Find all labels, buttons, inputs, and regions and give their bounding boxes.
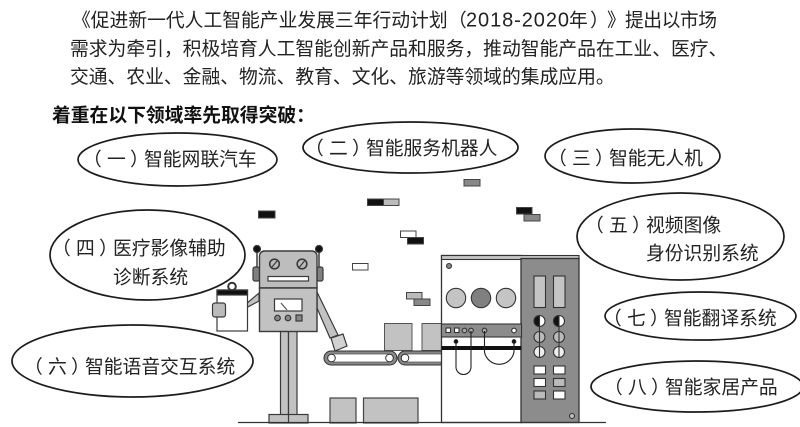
floating blocks: [258, 180, 540, 306]
callout: 五: （五）视频图像: [585, 214, 721, 236]
robot meter: [274, 299, 302, 311]
floor boxes: [330, 398, 418, 423]
robot: [212, 246, 347, 423]
machine white panel: [442, 256, 522, 422]
robot knobs: [275, 315, 302, 321]
callout: 三: （三）智能无人机: [548, 148, 703, 168]
robot left arm: [246, 293, 259, 308]
vertical gauges: [534, 276, 565, 308]
ground line: [238, 422, 606, 424]
control strip: [442, 324, 522, 337]
intro text block: 需求为牵引，积极培育人工智能创新产品和服务，推动智能产品在工业、医疗、: [70, 38, 727, 59]
robot left hand: [212, 303, 226, 317]
robot right hand: [331, 334, 347, 351]
robot body: [260, 288, 317, 332]
intro text block: 交通、农业、金融、物流、教育、文化、旅游等领域的集成应用。: [70, 66, 615, 87]
intro text block: 2018-2020: [466, 10, 569, 32]
callout: 七: （七）智能翻译系统: [603, 308, 777, 328]
intro text block: （: [448, 10, 467, 30]
callout: 八: （八）智能家居产品: [604, 376, 778, 398]
callout: 二: （二）智能服务机器人: [305, 138, 498, 158]
callout: 五: 身份识别系统: [646, 242, 759, 264]
intro text block: [70, 10, 727, 87]
robot head: [260, 251, 317, 288]
callout: 一: [78, 133, 277, 186]
intro text block: 》: [607, 10, 626, 30]
callout: 四: （四）医疗影像辅助: [52, 238, 226, 258]
robot eyes: [270, 259, 307, 269]
conveyor boxes: [384, 324, 442, 350]
antennae: [254, 246, 322, 270]
callout: 六: （六）智能语音交互系统: [24, 356, 235, 377]
callout: 七: [603, 292, 796, 340]
callout: 八: [591, 361, 800, 412]
cables: [454, 331, 516, 374]
callout: 二: [303, 122, 518, 173]
black bar: [442, 346, 522, 350]
intro text block: ）: [590, 10, 609, 30]
screw: [446, 264, 574, 418]
conveyor belts: [324, 351, 442, 365]
three dials: [446, 288, 516, 308]
robot legs: [269, 331, 308, 423]
heading: 着重在以下领域率先取得突破：: [52, 104, 315, 126]
machine dark panel: [521, 258, 579, 422]
clipboard: [217, 283, 248, 331]
intro text block: 《促进新一代人工智能产业发展三年行动计划: [72, 10, 448, 30]
callout: 三: [545, 129, 720, 183]
robot right arm: [317, 292, 338, 338]
machine top strip: [442, 256, 579, 260]
callout: 一: （一）智能网联汽车: [83, 148, 257, 170]
robot mouth: [268, 276, 308, 281]
square buttons: [534, 366, 565, 399]
intro text block: 年: [569, 10, 588, 30]
intro text block: 提出以市场: [625, 10, 717, 30]
callout: 四: 诊断系统: [113, 266, 188, 288]
callout: 五: [577, 193, 784, 280]
machine: [442, 256, 579, 422]
ears: [253, 267, 323, 281]
callout: 四: [50, 210, 245, 300]
half-filled switches: [534, 316, 564, 358]
callout: 六: [12, 325, 253, 397]
